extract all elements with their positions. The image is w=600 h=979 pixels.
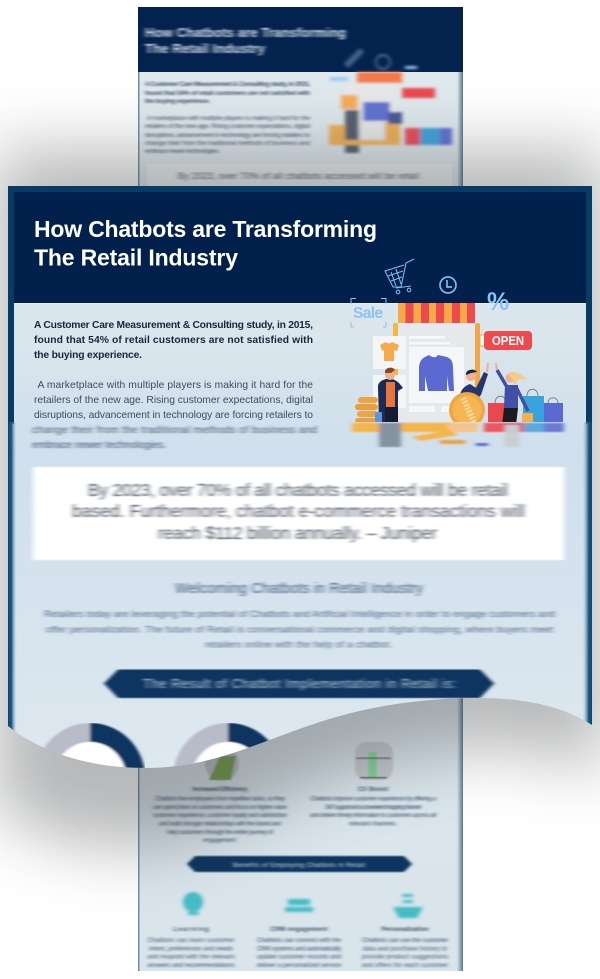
- intro paragraph: A marketplace with multiple players is making it hard for the: [38, 380, 313, 391]
- back feature columns text: update customer records and: [257, 954, 341, 960]
- banner: result of chatbot implementation: [104, 670, 494, 698]
- back intro text: A marketplace with multiple players is making it hard for the: [147, 115, 310, 122]
- back header: The Retail Industry: [145, 41, 266, 56]
- back feature columns text: Chatbots can connect with the: [257, 938, 342, 944]
- back intro text: the buying experience.: [145, 98, 210, 105]
- intro paragraph: [34, 380, 313, 421]
- result column 2 text: [310, 787, 437, 828]
- intro paragraph blurred lines: embrace newer technologies.: [32, 440, 166, 451]
- shopping bags: [488, 388, 563, 422]
- icon: percent: %: [487, 288, 509, 316]
- back intro text: embrace newer technologies.: [145, 148, 220, 155]
- back header: [138, 7, 463, 72]
- donut chart 2: [173, 723, 270, 766]
- result column 2 text: Chatbots improve customer experience by offering a: [310, 796, 437, 802]
- intro bold text: found that 54% of retail customers are not satisfied with: [34, 335, 313, 346]
- intro paragraph: retailers of the new age. Rising customer expectations, digital: [34, 395, 313, 406]
- result column 2 text: 24/7 support and a convenient shopping channel: [325, 805, 421, 811]
- result column 1 text: and build stronger relationships with the brand and: [159, 822, 281, 828]
- donut chart 1: [44, 723, 145, 768]
- result column 1 text: can spend time on customers and focus on higher value: [153, 805, 288, 811]
- result column 2 text: CX Boost: [358, 787, 388, 793]
- person: man on phone: [375, 368, 403, 425]
- illustration: blurred floor and legs: [352, 423, 564, 447]
- result column 1 text: Chatbots free employees from repetitive tasks, so they: [155, 796, 285, 802]
- back feature columns text: Chatbots can use the customer: [362, 938, 448, 944]
- back feature columns text: Chatbots can learn customer: [148, 938, 234, 944]
- intro paragraph blurred lines: change their from the traditional methods of business and: [32, 425, 317, 436]
- intro paragraph: disruptions, advancement in technology are forcing retailers to: [34, 410, 313, 421]
- coin stack: [355, 397, 378, 422]
- person: man high five: [460, 362, 489, 397]
- product cards: [373, 336, 464, 412]
- icon: clock: [440, 277, 456, 293]
- back feature columns text: and offers for each customer: [362, 963, 448, 969]
- back intro text: retailers of the new age. Rising customer expectations, digital: [145, 123, 310, 130]
- illustration: shop and shoppers: [351, 259, 563, 428]
- icon: grey circle with green stripe: [355, 742, 393, 780]
- back banner: benefits: [187, 856, 412, 872]
- result column 2 text: relevant channels.: [349, 822, 397, 828]
- back callout box: By 2023, over 70% of all chatbots accessed will be retail: [178, 171, 419, 181]
- back intro text: A Customer Care Measurement & Consulting study, in 2015,: [145, 81, 310, 88]
- title: [34, 216, 377, 270]
- back feature columns text: Learning: [174, 927, 209, 933]
- back intro text: [145, 81, 310, 155]
- sign: open: OPEN: [492, 333, 524, 348]
- paragraph: welcoming chatbots: Retailers today are leveraging the potential of Chatbots and Artificial Intelligence in order to engage customers and: [44, 609, 555, 620]
- banner: result of chatbot implementation: The Result of Chatbot Implementation in Retail is:: [143, 676, 456, 691]
- heading: welcoming chatbots: Welcoming Chatbots in Retail Industry: [175, 581, 424, 597]
- result column 1 text: engagement.: [203, 838, 237, 844]
- page border top: [8, 186, 592, 424]
- back feature columns text: provide product suggestions: [362, 954, 448, 960]
- blurred lower page section: [8, 422, 592, 768]
- back feature columns text: Personalization: [382, 927, 429, 933]
- callout: retail stat: reach $112 billion annually. – Juniper: [158, 523, 437, 543]
- back feature columns text: CRM engagement: [270, 927, 328, 933]
- result column 1 text: [153, 787, 288, 844]
- title: The Retail Industry: [34, 244, 238, 270]
- back feature columns text: data and purchase history to: [363, 946, 448, 952]
- intro bold text: [34, 320, 313, 361]
- panel: background infographic page: [138, 7, 463, 971]
- back result columns: [153, 742, 437, 844]
- result column 2 text: and deliver timely information to customers across all: [310, 813, 436, 819]
- back feature columns text: intent, preferences and needs: [149, 946, 233, 952]
- icon: sale tag: [351, 298, 386, 327]
- paragraph: welcoming chatbots: [44, 609, 555, 650]
- back feature columns text: answers and recommendations: [148, 963, 234, 969]
- sign: open: [480, 331, 532, 350]
- icon: shopping cart: [385, 259, 414, 294]
- intro paragraph blurred lines: [32, 425, 317, 451]
- icon: sale tag: Sale: [353, 305, 383, 322]
- drop shadow of curled front page: [0, 150, 600, 849]
- back callout box: [147, 164, 452, 188]
- back intro text: disruptions, advancement in technology are forcing retailers to: [145, 132, 310, 139]
- callout: retail stat: [33, 467, 564, 560]
- back banner: benefits: Benefits of Employing Chatbots in Retail: [233, 862, 365, 869]
- back feature columns text: deliver a personalized service: [257, 963, 342, 969]
- icons: teal row: [183, 892, 423, 918]
- result column 1 text: customer experience, customer loyalty and satisfaction: [153, 813, 287, 819]
- callout: retail stat: By 2023, over 70% of all chatbots accessed will be retail: [88, 480, 508, 500]
- shop front: [393, 303, 480, 427]
- back feature columns text: and respond with the relevant: [148, 954, 235, 960]
- result column 1 text: help customers through the entire journey of: [167, 830, 273, 836]
- back feature columns text: [148, 927, 448, 969]
- back illustration: [329, 50, 452, 153]
- panel: front curled page: [8, 186, 592, 824]
- title: How Chatbots are Transforming: [34, 216, 377, 242]
- result column 1 text: Increased Efficiency: [192, 787, 248, 793]
- icon: green circle: [205, 747, 239, 781]
- paragraph: welcoming chatbots: retailers online with the help of a chatbot.: [205, 640, 392, 650]
- back intro text: found that 54% of retail customers are not satisfied with: [145, 90, 310, 97]
- callout: retail stat: based. Furthermore, chatbot e-commerce transactions will: [72, 501, 525, 521]
- intro bold text: the buying experience.: [34, 350, 142, 361]
- header band: [14, 192, 586, 303]
- coin with bitcoin: [449, 392, 485, 422]
- paragraph: welcoming chatbots: offer personalization. The future of Retail is conversational commerce and digital shopping, where buyers meet: [46, 624, 553, 636]
- back header: How Chatbots are Transforming: [145, 25, 346, 40]
- back feature columns text: CRM systems and automatically: [257, 946, 341, 952]
- back intro text: change their from the traditional methods of business and: [145, 140, 310, 147]
- intro bold text: A Customer Care Measurement & Consulting study, in 2015,: [34, 320, 313, 331]
- person: woman high five: [496, 363, 533, 427]
